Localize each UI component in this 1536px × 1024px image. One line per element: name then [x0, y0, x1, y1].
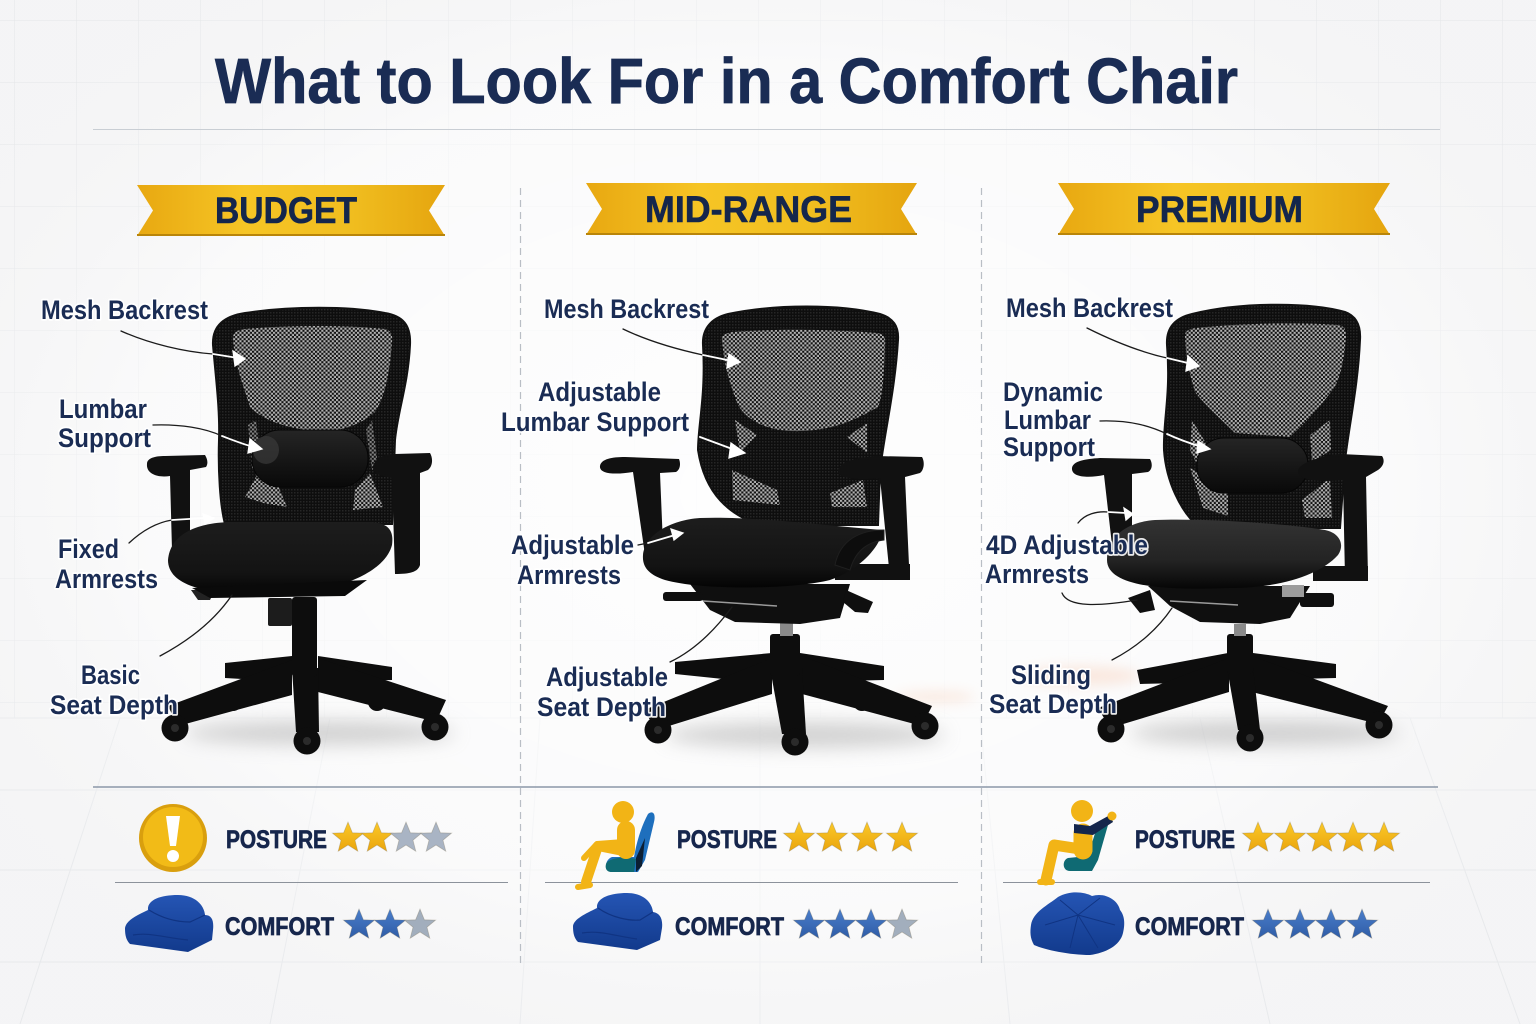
rating: budget posture — [139, 804, 452, 872]
arrow: premium mesh — [1087, 328, 1199, 371]
banner: mid-range — [586, 183, 917, 235]
banner: budget: BUDGET — [215, 190, 357, 231]
mesh panel — [1185, 323, 1346, 437]
seat — [1107, 520, 1341, 589]
arrow: premium seat depth — [1112, 608, 1172, 660]
arrow: budget armrests — [129, 514, 214, 543]
labels: premium: Seat Depth — [989, 689, 1117, 719]
rating: budget comfort — [125, 895, 436, 952]
stars — [783, 822, 918, 851]
chair: mid-range — [600, 306, 945, 756]
labels: mid-range: Mesh Backrest — [544, 294, 709, 324]
chair back — [213, 308, 410, 524]
lumbar pillow — [252, 430, 368, 487]
arrow: mid seat depth — [670, 607, 732, 662]
lumbar pillow — [1197, 438, 1308, 493]
seat — [168, 522, 392, 594]
labels: premium: Armrests — [985, 559, 1089, 589]
labels: mid-range: Armrests — [517, 560, 621, 590]
icon: plush cushion — [1030, 892, 1124, 955]
arrow: budget mesh — [121, 331, 245, 366]
armrests — [147, 453, 432, 574]
labels: budget: Basic — [81, 660, 140, 690]
icon: warning — [139, 804, 207, 872]
annotation arrows — [121, 328, 1210, 662]
icon: seated person — [578, 801, 655, 887]
rating: budget comfort: COMFORT — [225, 913, 334, 941]
banner: premium: PREMIUM — [1136, 189, 1303, 230]
icon: reclining person — [1040, 800, 1116, 882]
banner: mid-range: MID-RANGE — [645, 189, 852, 230]
rating: mid-range posture — [578, 801, 918, 887]
arrow: budget lumbar — [153, 425, 262, 453]
rating: mid-range comfort: COMFORT — [675, 913, 784, 941]
banner: premium — [1058, 183, 1390, 235]
labels: mid-range — [501, 294, 709, 722]
stars — [793, 909, 918, 938]
labels: budget: Seat Depth — [50, 690, 178, 720]
arrow: budget seat depth — [160, 595, 232, 656]
labels: premium: Sliding — [1011, 660, 1091, 690]
chair mechanism — [663, 584, 873, 624]
arrow: mid lumbar head — [729, 443, 745, 458]
chair base — [1098, 624, 1392, 752]
labels: budget: Support — [58, 423, 151, 453]
stars — [332, 822, 452, 851]
arrow: mid lumbar — [700, 437, 735, 450]
labels: premium — [985, 293, 1173, 719]
labels: mid-range: Lumbar Support — [501, 407, 689, 437]
rating: budget posture: POSTURE — [226, 826, 327, 854]
labels: mid-range: Seat Depth — [537, 692, 666, 722]
rating: premium comfort: COMFORT — [1135, 913, 1244, 941]
arrow: premium armrests lower — [1062, 593, 1137, 604]
labels: mid-range: Adjustable — [546, 662, 668, 692]
chair: premium — [1072, 305, 1400, 752]
rating: premium comfort — [1030, 892, 1378, 955]
labels: mid-range: Adjustable — [511, 530, 634, 560]
labels: premium: 4D Adjustable — [986, 530, 1148, 560]
chair: budget — [147, 308, 455, 754]
armrests — [1072, 454, 1384, 581]
labels: premium: Support — [1003, 432, 1095, 462]
labels: mid-range: Adjustable — [538, 377, 661, 407]
arrow: premium lumbar — [1100, 421, 1210, 453]
mesh panel — [233, 326, 392, 431]
seat — [643, 518, 882, 588]
rating: mid-range comfort — [573, 893, 918, 950]
banner: budget — [137, 185, 445, 236]
arrow: premium armrests upper — [1078, 508, 1133, 523]
labels: budget: Fixed — [58, 534, 119, 564]
rating: mid-range posture: POSTURE — [677, 826, 777, 854]
armrests — [600, 456, 924, 580]
title: What to Look For in a Comfort Chair — [215, 45, 1238, 117]
labels: budget: Armrests — [55, 564, 158, 594]
rating: premium posture — [1040, 800, 1400, 882]
arrow: mid mesh — [623, 329, 740, 368]
stars — [1242, 822, 1400, 851]
chair back — [698, 306, 898, 525]
stars — [343, 909, 436, 938]
labels: budget: Mesh Backrest — [41, 295, 208, 325]
chair base — [162, 590, 448, 754]
chair back — [1164, 305, 1360, 528]
icon: cushion — [573, 893, 662, 950]
labels: premium: Dynamic — [1003, 377, 1103, 407]
labels: premium: Lumbar — [1004, 405, 1091, 435]
mesh panel — [722, 330, 885, 431]
labels: premium: Mesh Backrest — [1006, 293, 1173, 323]
chair mechanism — [1128, 585, 1334, 624]
arrow: mid armrests — [638, 529, 683, 545]
chair base — [644, 622, 938, 756]
icon: cushion — [125, 895, 213, 952]
labels: budget — [41, 295, 208, 720]
labels: budget: Lumbar — [59, 394, 147, 424]
stars — [1252, 909, 1378, 938]
rating: premium posture: POSTURE — [1135, 826, 1235, 854]
